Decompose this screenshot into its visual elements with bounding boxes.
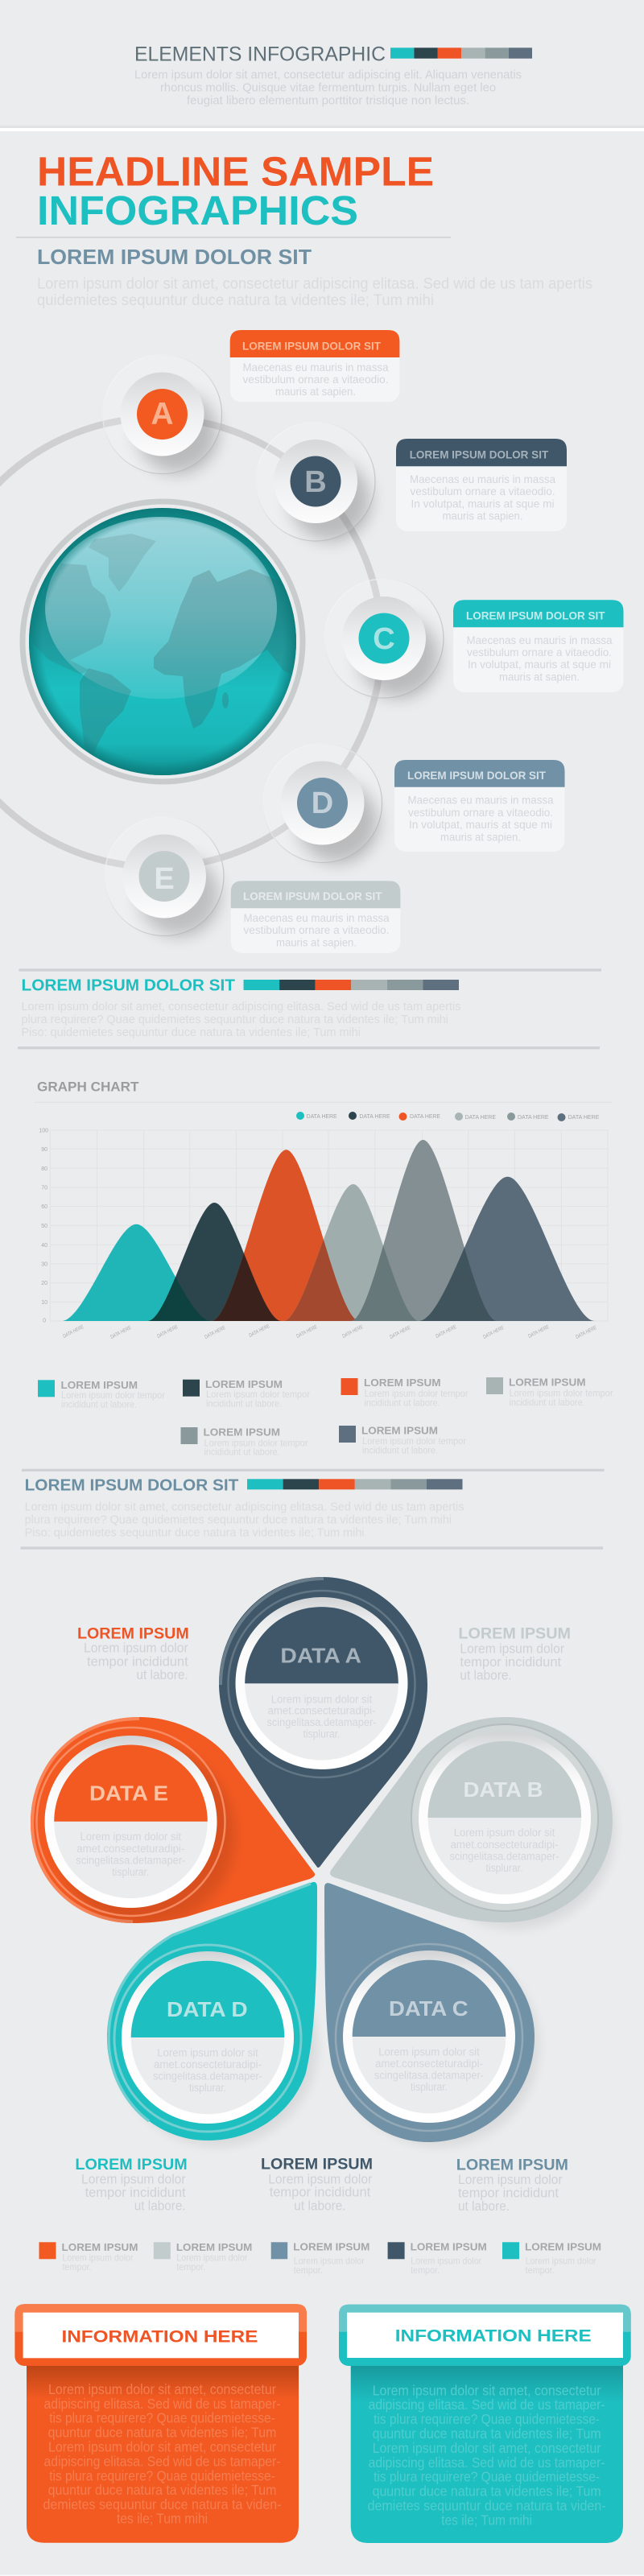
side label: orange: ut labore. <box>136 1668 188 1682</box>
callout C: In volutpat, mauris at sque mi <box>468 658 611 671</box>
node D: D <box>312 786 333 820</box>
chart legend: DATA HERE <box>410 1113 440 1120</box>
orange card text: adipiscing elitasa. Sed wid de us tamaper- <box>43 2396 281 2412</box>
side label: orange: tempor incididunt <box>87 1655 188 1670</box>
callout A: mauris at sapien. <box>275 385 356 398</box>
side label: orange <box>77 1625 189 1682</box>
teal card text: tis plura requirere? Quae quidemietesse- <box>374 2411 600 2427</box>
continents <box>29 534 303 758</box>
key item 1: LOREM IPSUM <box>61 1379 138 1391</box>
chart legend: DATA HERE <box>465 1113 496 1121</box>
petal E: amet.consecteturadipi- <box>76 1843 184 1855</box>
petal shadows <box>118 1729 615 2146</box>
callout C <box>453 600 623 692</box>
callout C: mauris at sapien. <box>499 670 580 683</box>
bottom label: dark: Lorem ipsum dolor <box>268 2172 373 2186</box>
petal E: scingelitasa.detamaper- <box>76 1855 185 1866</box>
orange card text: tes ile; Tum mihi <box>117 2511 208 2527</box>
key item 3: incididunt ut labore. <box>364 1397 440 1409</box>
chart legend: DATA HERE <box>307 1113 337 1120</box>
bottom label: teal: Lorem ipsum dolor <box>81 2173 186 2187</box>
globe gloss <box>45 517 277 699</box>
callout D: mauris at sapien. <box>440 831 521 844</box>
chart gridlines <box>50 1130 608 1321</box>
teal card text: demietes sequuntur duce natura ta viden- <box>368 2497 606 2513</box>
callout B: vestibulum ornare a vitaeodio. <box>411 485 555 497</box>
top header band <box>0 126 644 131</box>
petal C: DATA C <box>389 1996 469 2021</box>
node E <box>105 816 224 935</box>
petal key item slate: Lorem ipsum dolor <box>294 2256 365 2267</box>
teal card header: INFORMATION HERE <box>395 2326 592 2346</box>
bottom label: teal: LOREM IPSUM <box>75 2157 188 2174</box>
chart x axis labels: DATA HERE <box>482 1325 506 1340</box>
petal D: amet.consecteturadipi- <box>154 2058 262 2070</box>
petal C: tisplurar. <box>411 2081 448 2093</box>
orange card text: Lorem ipsum dolor sit amet, consectetur <box>48 2381 276 2397</box>
petal key item teal: Lorem ipsum dolor <box>526 2256 597 2267</box>
subheading paragraph <box>37 275 592 309</box>
callout A: Maecenas eu mauris in massa <box>243 361 389 374</box>
chart x axis labels: DATA HERE <box>295 1324 319 1340</box>
chart x axis labels: DATA HERE <box>248 1323 271 1339</box>
info card: orange <box>14 2304 307 2543</box>
callout D: In volutpat, mauris at sque mi <box>409 818 552 831</box>
teal card text: adipiscing elitasa. Sed wid de us tamaper- <box>369 2396 605 2413</box>
chart x axis labels: DATA HERE <box>109 1325 133 1340</box>
intro paragraph: Lorem ipsum dolor sit amet, consectetur adipiscing elit. Aliquam venenatis <box>134 68 522 82</box>
section paragraph two: plura requirere? Quae quidemietes sequuntur duce natura ta videntes ile; Tum mihi <box>25 1513 452 1526</box>
chart legend: DATA HERE <box>518 1113 549 1121</box>
key item 6: Lorem ipsum dolor tempor <box>362 1435 466 1447</box>
orange card text: demietes sequuntur duce natura ta viden- <box>43 2496 282 2512</box>
chart x axis labels: DATA HERE <box>435 1324 458 1340</box>
petal E: Lorem ipsum dolor sit <box>80 1831 181 1843</box>
key item 5: LOREM IPSUM <box>203 1426 280 1438</box>
globe rim shading <box>29 508 296 775</box>
headline <box>37 148 434 233</box>
petal key item teal: tempor. <box>526 2264 555 2276</box>
petal key item light grey <box>154 2241 252 2273</box>
section paragraph two: Piso: quidemietes sequuntur duce natura ta videntes ile; Tum mihi <box>25 1525 365 1539</box>
callout A: LOREM IPSUM DOLOR SIT <box>242 339 381 352</box>
petal key item light grey: tempor. <box>176 2261 205 2273</box>
callout D: vestibulum ornare a vitaeodio. <box>408 806 553 819</box>
orange card text: quuntur duce natura ta videntes ile; Tum <box>48 2482 276 2498</box>
callout D: LOREM IPSUM DOLOR SIT <box>407 769 546 782</box>
key item 6 <box>339 1424 466 1455</box>
petal A: Lorem ipsum dolor sit <box>271 1693 372 1705</box>
petal B: Lorem ipsum dolor sit <box>454 1827 555 1839</box>
chart y axis labels: 0 <box>43 1319 46 1323</box>
callout E: mauris at sapien. <box>276 935 357 948</box>
colour key bar: section two <box>247 1479 462 1489</box>
bottom label: dark: ut labore. <box>294 2198 346 2213</box>
petal B: DATA B <box>464 1777 543 1802</box>
callout D <box>394 760 565 852</box>
title: elements infographic: ELEMENTS INFOGRAPHIC <box>134 43 386 66</box>
chart x axis labels: DATA HERE <box>156 1324 180 1340</box>
key item 4: LOREM IPSUM <box>509 1377 586 1389</box>
chart y axis labels <box>39 1129 48 1323</box>
petal key item teal <box>502 2241 601 2276</box>
callout B: Maecenas eu mauris in massa <box>410 473 555 485</box>
bottom label: teal: ut labore. <box>134 2199 186 2214</box>
teal card text: Lorem ipsum dolor sit amet, consectetur <box>373 2382 601 2398</box>
petal key item slate <box>271 2241 369 2276</box>
key item 4: incididunt ut labore. <box>509 1397 584 1408</box>
key item 6: LOREM IPSUM <box>361 1424 438 1436</box>
petal A: amet.consecteturadipi- <box>267 1705 375 1717</box>
key item 2: Lorem ipsum dolor tempor <box>206 1389 310 1400</box>
callout B: mauris at sapien. <box>443 509 523 522</box>
headline: HEADLINE SAMPLE <box>37 148 434 195</box>
chart legend: DATA HERE <box>359 1113 390 1120</box>
petal B: scingelitasa.detamaper- <box>449 1850 559 1863</box>
colour key bar: header <box>390 47 532 59</box>
key item 5: incididunt ut labore. <box>204 1447 280 1458</box>
petal key item slate: LOREM IPSUM <box>293 2241 369 2253</box>
key item 4: Lorem ipsum dolor tempor <box>509 1388 613 1399</box>
petal key item light grey: Lorem ipsum dolor <box>176 2252 247 2264</box>
petal B: tisplurar. <box>486 1862 523 1874</box>
chart key <box>38 1377 613 1458</box>
teal card text: adipiscing elitasa. Sed wid de us tamaper- <box>369 2454 605 2471</box>
callout E: Maecenas eu mauris in massa <box>243 911 390 924</box>
key item 6: incididunt ut labore. <box>362 1444 438 1455</box>
teal card text: tes ile; Tum mihi <box>441 2512 532 2528</box>
orange card header: INFORMATION HERE <box>61 2326 258 2346</box>
key item 1 <box>38 1379 165 1410</box>
bottom label: dark: LOREM IPSUM <box>261 2156 373 2173</box>
petal key item light grey: LOREM IPSUM <box>176 2241 252 2253</box>
intro paragraph: rhoncus mollis. Quisque vitae fermentum turpis. Nullam eget leo <box>160 80 496 95</box>
petal E: DATA E <box>89 1781 168 1806</box>
petal A: tisplurar. <box>303 1728 340 1740</box>
section paragraph one: Lorem ipsum dolor sit amet, consectetur adipiscing elitasa. Sed wid de us tam apertis <box>21 1000 460 1013</box>
bell curves <box>61 1140 595 1321</box>
side label: light grey: tempor incididunt <box>460 1655 562 1670</box>
subheading: LOREM IPSUM DOLOR SIT <box>37 245 312 269</box>
teal card body <box>351 2363 623 2543</box>
chart y axis labels: 70 <box>41 1185 47 1191</box>
orange card text: tis plura requirere? Quae quidemietesse- <box>49 2410 275 2426</box>
chart y axis labels: 30 <box>41 1262 47 1267</box>
petal A: scingelitasa.detamaper- <box>267 1716 377 1728</box>
callout A <box>230 330 399 402</box>
node C <box>324 579 444 698</box>
petal A <box>219 1577 427 1868</box>
petal C: amet.consecteturadipi- <box>375 2058 483 2070</box>
petal key item orange <box>39 2241 138 2273</box>
key item 3 <box>341 1377 469 1409</box>
chart x axis labels: DATA HERE <box>575 1325 598 1340</box>
petal D: tisplurar. <box>189 2082 226 2094</box>
petal key item orange: tempor. <box>63 2261 92 2273</box>
chart x axis labels: DATA HERE <box>527 1324 551 1340</box>
teal card header <box>339 2305 631 2366</box>
key item 5 <box>180 1426 308 1458</box>
callout C: Maecenas eu mauris in massa <box>467 634 613 646</box>
petal C: scingelitasa.detamaper- <box>374 2069 484 2082</box>
subheading paragraph: quidemietes sequuntur duce natura ta videntes ile; Tum mihi <box>37 291 434 309</box>
callout A: vestibulum ornare a vitaeodio. <box>243 373 388 386</box>
globe <box>23 502 303 782</box>
petal C <box>324 1883 535 2142</box>
side label: orange: LOREM IPSUM <box>77 1625 189 1642</box>
key item 5: Lorem ipsum dolor tempor <box>204 1437 308 1448</box>
petal B: amet.consecteturadipi- <box>451 1839 559 1851</box>
section heading: slate: LOREM IPSUM DOLOR SIT <box>25 1477 238 1495</box>
callout E: vestibulum ornare a vitaeodio. <box>243 923 390 936</box>
petal key item orange: LOREM IPSUM <box>61 2241 138 2253</box>
callout E <box>231 881 400 953</box>
chart x axis labels: DATA HERE <box>389 1325 412 1340</box>
orange card text: tis plura requirere? Quae quidemietesse- <box>49 2467 275 2483</box>
orange card body <box>27 2363 299 2543</box>
petal D: scingelitasa.detamaper- <box>153 2070 262 2082</box>
orange card text <box>43 2381 282 2527</box>
bottom label: slate: tempor incididunt <box>458 2186 559 2200</box>
node C: C <box>373 622 395 656</box>
chart title: GRAPH CHART <box>37 1080 138 1095</box>
subheading paragraph: Lorem ipsum dolor sit amet, consectetur adipiscing elitasa. Sed wid de us tam apertis <box>37 275 592 293</box>
callout C: LOREM IPSUM DOLOR SIT <box>466 609 605 622</box>
orange card text: quuntur duce natura ta videntes ile; Tum <box>48 2425 276 2441</box>
bottom label: teal <box>75 2157 188 2214</box>
key item 1: Lorem ipsum dolor tempor <box>61 1389 165 1401</box>
callout E: LOREM IPSUM DOLOR SIT <box>243 890 382 902</box>
chart legend <box>296 1112 599 1121</box>
globe sphere <box>29 508 296 775</box>
bottom label: slate: ut labore. <box>458 2199 510 2214</box>
chart x axis labels: DATA HERE <box>341 1324 365 1340</box>
chart y axis labels: 20 <box>41 1281 47 1286</box>
petal E: tisplurar. <box>112 1866 149 1878</box>
key item 2: LOREM IPSUM <box>205 1378 283 1390</box>
node B: B <box>304 465 327 499</box>
key item 4 <box>486 1377 613 1408</box>
key item 3: Lorem ipsum dolor tempor <box>364 1388 469 1399</box>
side label: light grey <box>458 1626 571 1682</box>
callout B: LOREM IPSUM DOLOR SIT <box>410 448 549 460</box>
petal A: DATA A <box>280 1644 361 1668</box>
section paragraph one: Piso: quidemietes sequuntur duce natura ta videntes ile; Tum mihi <box>21 1026 361 1039</box>
orange card header <box>14 2304 307 2366</box>
side label: light grey: Lorem ipsum dolor <box>460 1641 565 1656</box>
chart y axis labels: 60 <box>41 1204 47 1210</box>
chart y axis labels: 90 <box>41 1147 47 1153</box>
orange card text: adipiscing elitasa. Sed wid de us tamaper- <box>43 2453 281 2469</box>
node D <box>262 744 382 863</box>
petal E <box>31 1717 315 1926</box>
section paragraph one <box>21 1000 460 1039</box>
section paragraph two: Lorem ipsum dolor sit amet, consectetur adipiscing elitasa. Sed wid de us tam apertis <box>25 1500 464 1513</box>
chart y axis labels: 100 <box>39 1129 48 1133</box>
petal C: Lorem ipsum dolor sit <box>378 2046 480 2058</box>
petal key item dark <box>388 2241 487 2276</box>
intro paragraph: feugiat libero elementum porttitor tristique non lectus. <box>187 93 469 108</box>
bottom label: teal: tempor incididunt <box>85 2186 186 2200</box>
key item 1: incididunt ut labore. <box>61 1399 137 1410</box>
petal key item orange: Lorem ipsum dolor <box>63 2252 134 2264</box>
chart y axis labels: 50 <box>41 1224 47 1229</box>
intro paragraph <box>134 68 522 108</box>
petal D: Lorem ipsum dolor sit <box>157 2046 258 2059</box>
section paragraph one: plura requirere? Quae quidemietes sequuntur duce natura ta videntes ile; Tum mihi <box>21 1013 448 1026</box>
side label: orange: Lorem ipsum dolor <box>84 1641 188 1656</box>
bottom label: dark: tempor incididunt <box>270 2186 371 2200</box>
petal key item slate: tempor. <box>294 2264 323 2276</box>
chart legend: DATA HERE <box>568 1113 599 1121</box>
callout D: Maecenas eu mauris in massa <box>407 794 554 807</box>
chart y axis labels: 80 <box>41 1166 47 1172</box>
teal card text: quuntur duce natura ta videntes ile; Tum <box>373 2425 601 2442</box>
node B <box>256 422 375 541</box>
section paragraph two <box>25 1500 464 1539</box>
chart x axis labels <box>62 1323 598 1340</box>
key item 3: LOREM IPSUM <box>364 1377 441 1389</box>
teal card text: quuntur duce natura ta videntes ile; Tum <box>373 2483 601 2500</box>
teal card text: Lorem ipsum dolor sit amet, consectetur <box>373 2440 601 2456</box>
node E: E <box>154 862 175 896</box>
colour key bar: section one <box>243 980 459 990</box>
bottom label: slate: LOREM IPSUM <box>456 2157 568 2174</box>
connecting arc <box>0 418 382 867</box>
graph chart panel <box>35 1080 612 1340</box>
chart y axis labels: 10 <box>41 1300 47 1306</box>
teal card text <box>368 2382 606 2528</box>
headline: INFOGRAPHICS <box>37 188 358 233</box>
side label: light grey: ut labore. <box>460 1668 512 1682</box>
chart y axis labels: 40 <box>41 1243 47 1249</box>
bottom label: slate <box>456 2157 568 2214</box>
section heading: teal: LOREM IPSUM DOLOR SIT <box>21 977 235 995</box>
info card: teal <box>339 2305 631 2543</box>
petal key item dark: tempor. <box>411 2264 440 2276</box>
petal key item dark: Lorem ipsum dolor <box>411 2256 481 2267</box>
petal D <box>107 1882 317 2140</box>
bottom label: dark <box>261 2156 373 2213</box>
petal D: DATA D <box>167 1997 248 2021</box>
node A: A <box>151 397 174 431</box>
callout B <box>396 439 567 531</box>
node A <box>103 354 222 473</box>
petal B <box>330 1717 613 1922</box>
globe outer ring <box>23 502 303 782</box>
chart x axis labels: DATA HERE <box>204 1325 227 1340</box>
petal key <box>39 2241 601 2276</box>
side label: light grey: LOREM IPSUM <box>458 1626 571 1643</box>
callout B: In volutpat, mauris at sque mi <box>411 497 554 510</box>
chart x axis labels: DATA HERE <box>62 1324 85 1340</box>
callout C: vestibulum ornare a vitaeodio. <box>467 646 612 658</box>
bottom label: slate: Lorem ipsum dolor <box>458 2173 563 2187</box>
petal key item teal: LOREM IPSUM <box>525 2241 601 2253</box>
key item 2 <box>183 1378 310 1409</box>
key item 2: incididunt ut labore. <box>206 1397 282 1409</box>
orange card text: Lorem ipsum dolor sit amet, consectetur <box>48 2438 276 2454</box>
petal key item dark: LOREM IPSUM <box>411 2241 487 2253</box>
teal card text: tis plura requirere? Quae quidemietesse- <box>374 2469 600 2485</box>
